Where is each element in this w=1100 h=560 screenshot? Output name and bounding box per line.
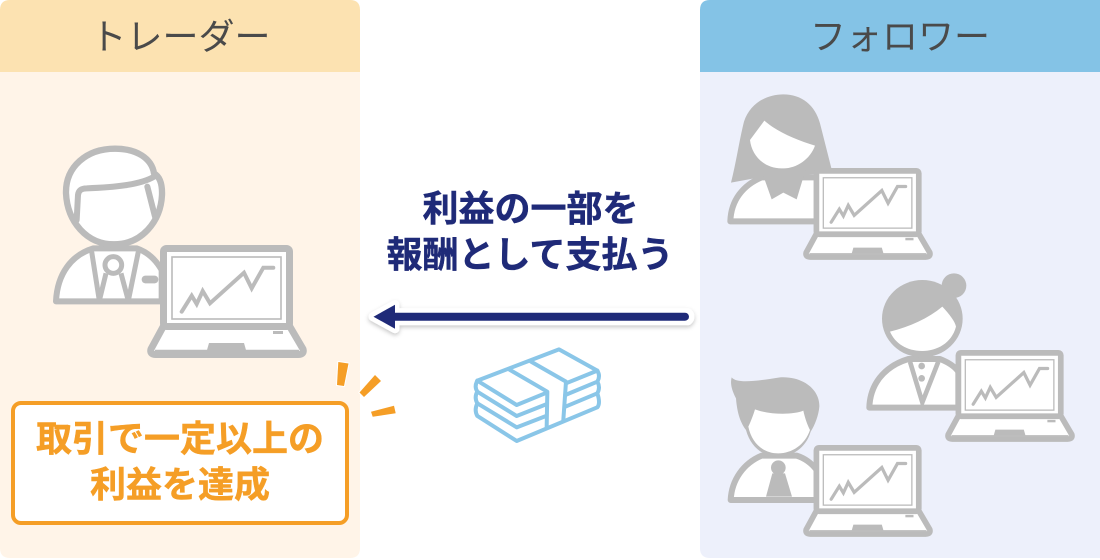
woman person — [730, 94, 833, 221]
center text: pay part of profits as reward — [387, 188, 673, 275]
man person — [731, 377, 819, 500]
heading: trader: トレーダー — [90, 16, 271, 57]
panel background: follower — [700, 72, 1100, 558]
header bar: trader — [0, 0, 360, 72]
callout: achievement: 利益を達成 — [90, 464, 270, 505]
header bar: follower — [700, 0, 1100, 72]
trader person — [56, 149, 162, 301]
trader laptop — [151, 248, 303, 354]
icon: stack of money — [476, 349, 599, 441]
center text: pay part of profits as reward: 利益の一部を — [422, 188, 639, 229]
bun-haired woman person — [869, 273, 966, 408]
callout: achievement — [13, 403, 347, 523]
panel: trader — [0, 0, 360, 558]
woman laptop — [806, 171, 930, 257]
panel: follower — [700, 0, 1100, 558]
center text: pay part of profits as reward: 報酬として支払う — [387, 234, 673, 275]
callout text: 取引で一定以上の — [36, 418, 324, 459]
heading: follower: フォロワー — [810, 16, 990, 57]
bun-haired woman laptop — [948, 353, 1072, 439]
icon: woman with bun and laptop — [869, 273, 1072, 439]
man laptop — [806, 448, 930, 534]
callout box — [13, 403, 347, 523]
icon: emphasis lines — [337, 362, 396, 417]
icon: trader with laptop — [56, 149, 303, 354]
icon: woman with laptop — [730, 94, 930, 257]
arrow: follower to trader — [373, 305, 690, 329]
icon: man with laptop — [731, 377, 930, 534]
panel background: trader — [0, 72, 360, 558]
